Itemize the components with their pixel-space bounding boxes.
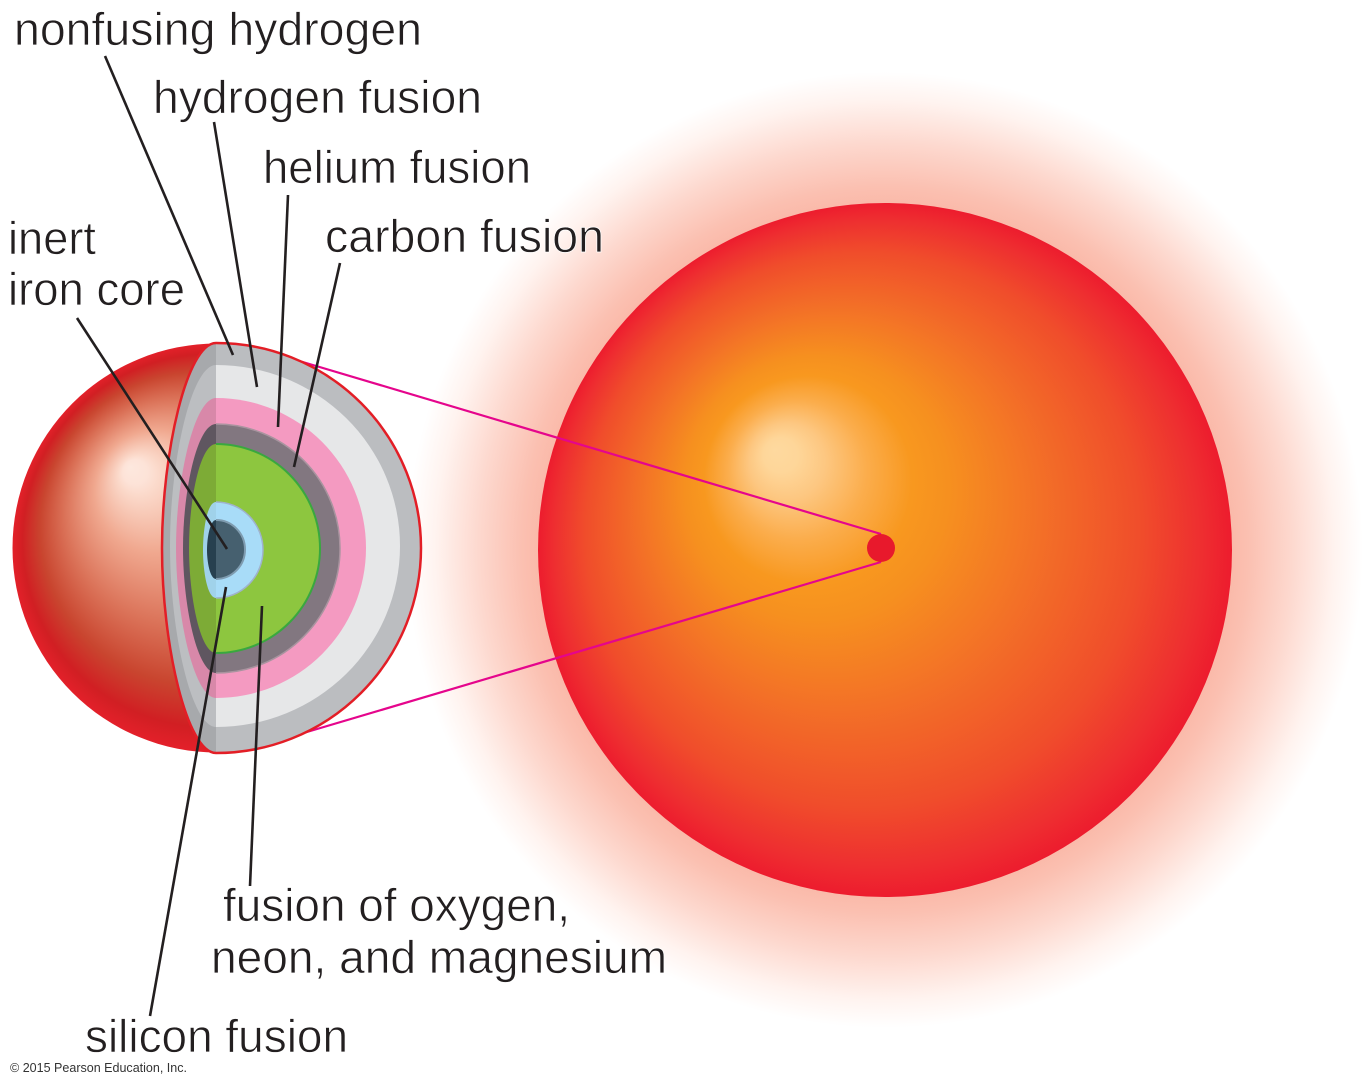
copyright: © 2015 Pearson Education, Inc. — [10, 1060, 187, 1075]
small star dot in the large star — [867, 534, 895, 562]
label: silicon fusion: silicon fusion — [85, 1010, 348, 1062]
label: helium fusion: helium fusion — [263, 141, 531, 193]
outer sphere surface — [12, 344, 422, 752]
label: fusion of oxygen, neon, and magnesium — [211, 879, 667, 983]
cutaway star core diagram — [12, 343, 422, 753]
label: inert iron core — [8, 212, 185, 315]
label: fusion of oxygen, neon, and magnesium: neon, and magnesium — [211, 931, 667, 983]
layer: silicon fusion — [203, 502, 263, 598]
magenta zoom line: bottom — [290, 562, 881, 737]
leader line: silicon fusion — [150, 587, 226, 1016]
label: inert iron core: inert — [8, 212, 96, 264]
leader line: carbon fusion — [294, 263, 340, 467]
layer: helium fusion — [176, 398, 366, 698]
large star — [538, 203, 1232, 897]
layer: inert iron core — [207, 520, 245, 579]
magenta zoom line: top — [296, 360, 881, 534]
leader line: hydrogen fusion — [214, 122, 257, 387]
layer: carbon fusion — [183, 424, 340, 673]
leader line: oxygen, neon, magnesium fusion — [250, 606, 262, 886]
layer: nonfusing hydrogen — [162, 343, 421, 753]
label: fusion of oxygen, neon, and magnesium: fusion of oxygen, — [223, 879, 570, 931]
leader line: nonfusing hydrogen — [105, 56, 233, 355]
label: hydrogen fusion: hydrogen fusion — [153, 71, 482, 123]
layer: hydrogen fusion — [170, 365, 400, 727]
glow around large star — [407, 72, 1363, 1028]
label: nonfusing hydrogen: nonfusing hydrogen — [14, 3, 422, 55]
label: inert iron core: iron core — [8, 263, 185, 315]
leader line: inert iron core — [77, 318, 227, 549]
label: carbon fusion: carbon fusion — [325, 210, 604, 262]
leader line: helium fusion — [278, 195, 288, 427]
red outline of the cut — [162, 343, 421, 753]
layer: oxygen, neon and magnesium fusion — [189, 444, 320, 653]
